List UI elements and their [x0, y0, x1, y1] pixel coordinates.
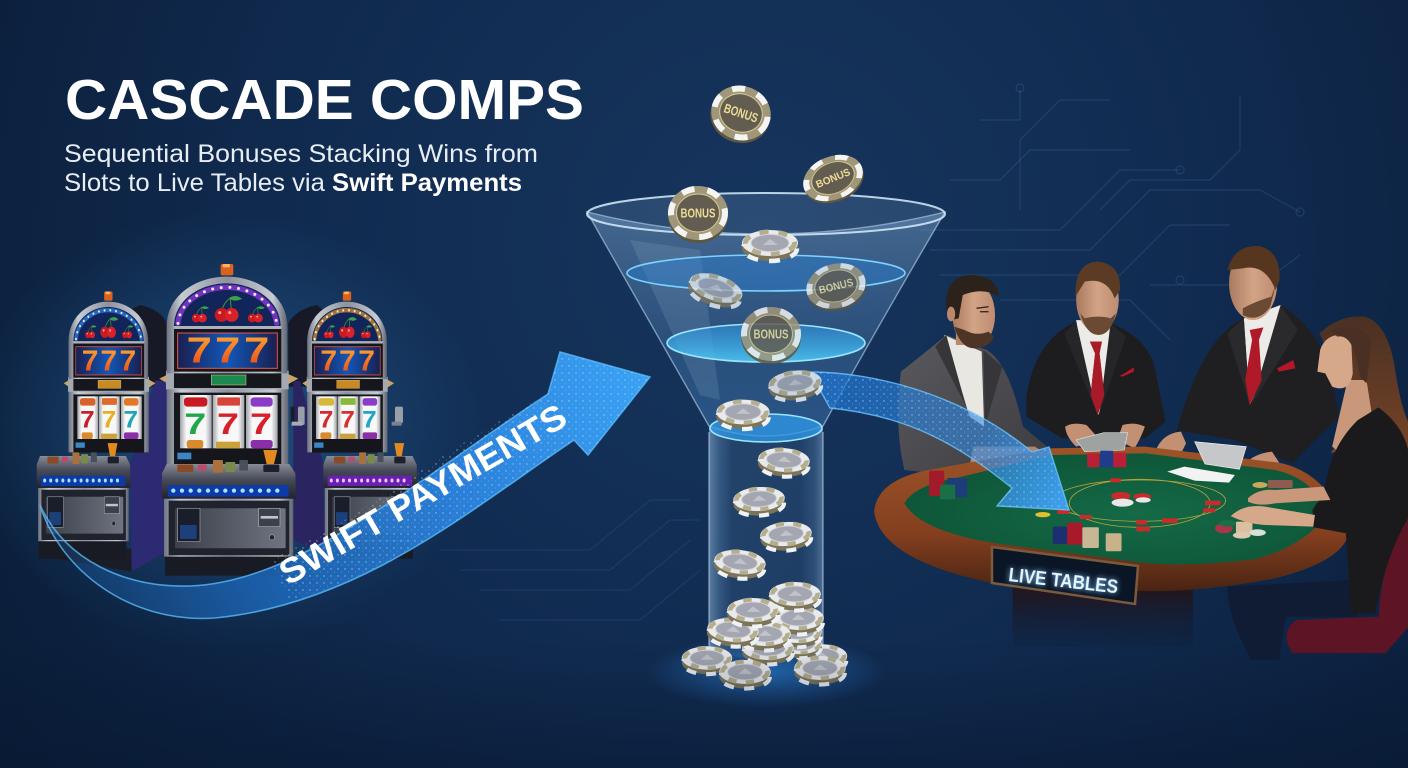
betting layout — [1054, 479, 1226, 527]
chair — [1287, 517, 1408, 653]
liquid ring 1 — [627, 255, 905, 291]
funnel — [587, 193, 1069, 659]
person 4 woman — [1231, 316, 1408, 613]
silver chips in funnel and tube — [684, 230, 823, 581]
woman's legs — [1227, 580, 1358, 660]
circuit lines upper right — [920, 84, 1304, 340]
person 2 black suit — [1026, 262, 1165, 448]
slot machine glow — [0, 210, 485, 650]
glass highlight — [630, 240, 720, 400]
funnel rim back — [587, 193, 945, 235]
live tables sign — [992, 547, 1138, 604]
live table group — [874, 246, 1408, 660]
circuit lines lower centre — [440, 500, 700, 620]
title: CASCADE COMPS — [65, 68, 584, 132]
subtitle: Sequential Bonuses Stacking Wins from — [64, 140, 538, 168]
table cards — [1167, 467, 1235, 483]
pile glow — [646, 636, 886, 708]
subtitle — [64, 140, 538, 197]
liquid ring 2 — [667, 324, 865, 362]
funnel cone glass — [587, 212, 945, 436]
chip pile — [682, 582, 847, 689]
chip stacks — [929, 451, 1293, 551]
falling bonus chips — [668, 78, 871, 364]
arrow label: SWIFT PAYMENTS — [272, 397, 573, 593]
person 1 grey suit — [898, 275, 1047, 480]
table top — [874, 433, 1348, 591]
liquid ring 3 — [710, 414, 822, 442]
centre machine — [159, 264, 305, 576]
arrow: to live tables — [810, 372, 1069, 510]
slot machines — [37, 264, 417, 576]
bottom vignette — [0, 640, 1408, 768]
live tables sign: LIVE TABLES — [1007, 565, 1119, 598]
left machine — [37, 292, 167, 572]
right machine — [288, 292, 417, 559]
subtitle: Slots to Live Tables via Swift Payments — [64, 169, 522, 197]
arrow: swift payments — [40, 352, 650, 618]
pedestal — [1013, 587, 1193, 647]
person 3 black suit — [1155, 246, 1339, 477]
